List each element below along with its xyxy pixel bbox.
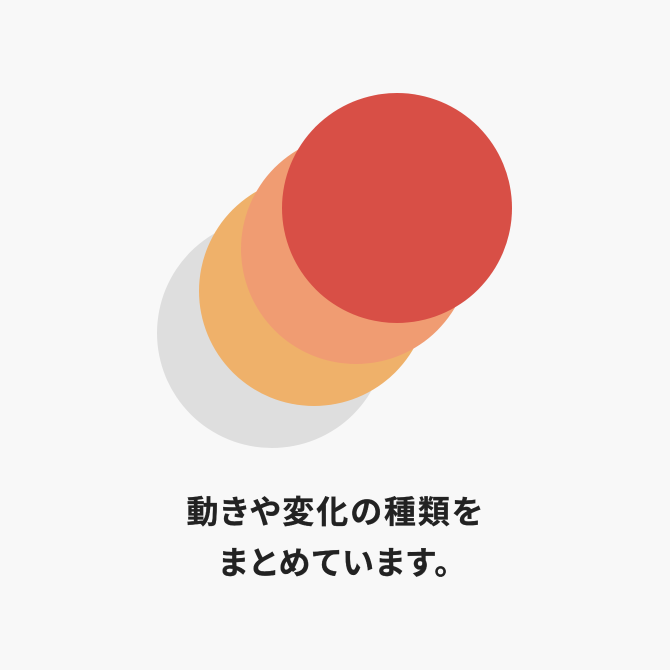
circle: salmon [241,134,471,364]
caption line 1: 動きや変化の種類を [186,494,485,530]
circle: red [282,93,512,323]
circle: gray [157,218,387,448]
caption line 2: まとめています。 [219,545,452,581]
circle: yellow-orange [199,176,429,406]
